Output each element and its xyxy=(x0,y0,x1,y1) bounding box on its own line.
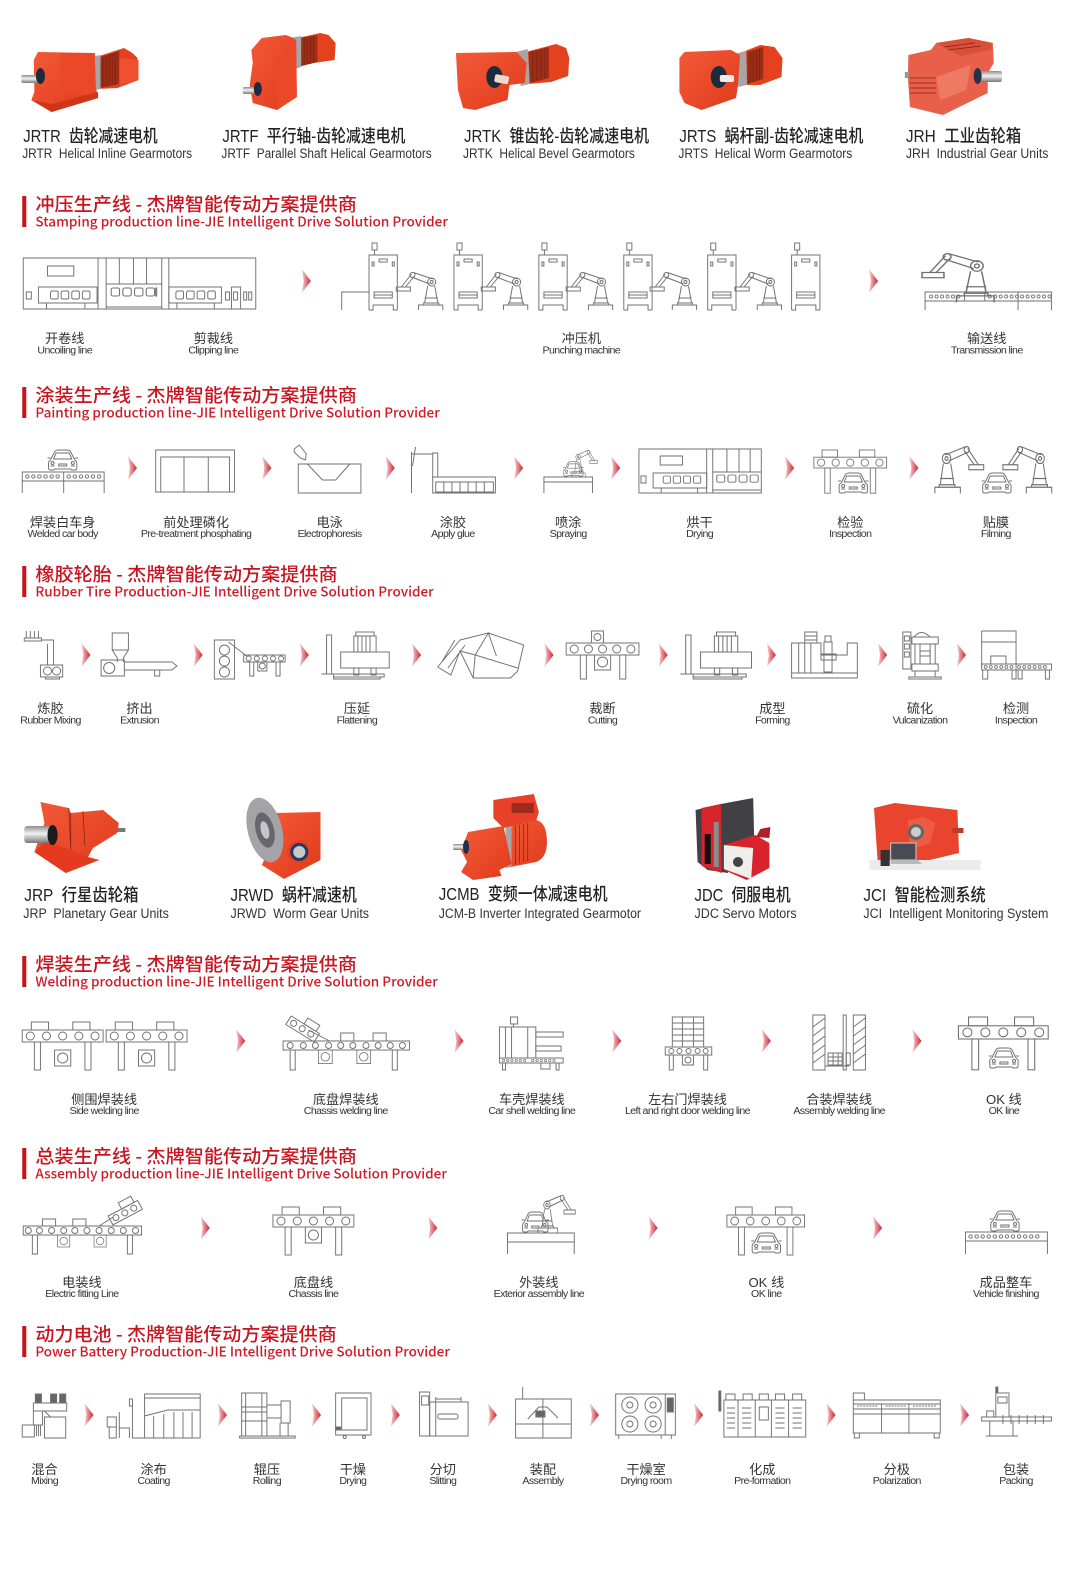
arrow xyxy=(428,1216,437,1240)
label: left and right door welding line xyxy=(625,1092,751,1117)
label: mixing: Mixing xyxy=(31,1475,59,1487)
product image: JCMB integrated gearmotor xyxy=(453,794,547,880)
label: extrusion: Extrusion xyxy=(120,715,160,726)
label: assembly: 装配 xyxy=(530,1462,556,1477)
label: electric fitting line xyxy=(45,1275,119,1300)
label: pre-treatment: Pre-treatment phosphating xyxy=(141,528,252,540)
label: side welding line: Side welding line xyxy=(69,1105,140,1117)
arrow xyxy=(201,1216,210,1240)
label: vulcanization: 硫化 xyxy=(907,701,933,716)
arrow xyxy=(611,456,620,480)
icon: drying room xyxy=(616,1394,675,1439)
label: vehicle finishing xyxy=(973,1275,1040,1300)
label: transmission line: 输送线 xyxy=(967,331,1006,346)
arrow xyxy=(300,643,309,667)
label: cutting xyxy=(588,701,618,726)
icon: polarization xyxy=(853,1393,940,1438)
product subtitle: JRWD: JRWD Worm Gear Units xyxy=(231,905,369,921)
label: slitting xyxy=(429,1462,457,1487)
product image: JDC servo motor xyxy=(696,798,770,880)
section bar xyxy=(22,956,26,987)
icon: drying xyxy=(639,449,761,493)
label: welded car body xyxy=(28,515,99,540)
product title: JRTF: JRTF 平行轴-齿轮减速电机 xyxy=(222,126,406,146)
arrow xyxy=(912,1029,922,1053)
icon: car shell welding xyxy=(499,1017,563,1070)
label: pre-formation: 化成 xyxy=(749,1462,775,1477)
product title: JCMB: JCMB 变频一体减速电机 xyxy=(439,884,608,904)
product title: JRTK: JRTK 锥齿轮-齿轮减速电机 xyxy=(464,126,649,146)
label: transmission line: Transmission line xyxy=(951,345,1023,356)
arrow xyxy=(873,1216,882,1240)
arrow xyxy=(302,269,311,293)
arrow xyxy=(869,269,878,293)
icon: OK line xyxy=(958,1017,1048,1070)
arrow xyxy=(262,456,271,480)
label: electrophoresis: Electrophoresis xyxy=(298,528,362,540)
product subtitle: JRTF: JRTF Parallel Shaft Helical Gearmotors xyxy=(221,145,432,161)
label: chassis welding line xyxy=(304,1092,388,1117)
arrow xyxy=(785,456,794,480)
label: rubber mixing xyxy=(20,701,82,726)
label: rolling: Rolling xyxy=(253,1475,282,1487)
arrow xyxy=(386,456,395,480)
panel: assembly production line xyxy=(22,1142,1047,1300)
label: coating xyxy=(138,1462,171,1487)
label: electrophoresis: 电泳 xyxy=(316,515,343,530)
product image: JCI monitoring system xyxy=(869,803,981,870)
icon: extrusion xyxy=(101,633,177,676)
icon: inspection tire xyxy=(982,631,1051,679)
panel: painting production line xyxy=(22,381,1052,540)
label: welded car body: 焊装白车身 xyxy=(30,515,96,530)
arrow xyxy=(590,1403,599,1427)
arrow xyxy=(194,643,203,667)
arrow xyxy=(762,1029,771,1053)
icon: pre-formation xyxy=(719,1391,806,1437)
arrow xyxy=(128,456,137,480)
icon: electric fitting xyxy=(23,1194,142,1254)
arrow xyxy=(659,643,668,667)
icon: door welding xyxy=(665,1017,712,1070)
icon: cutting xyxy=(566,631,639,679)
icon: mixing xyxy=(22,1394,67,1438)
icon: welded car body xyxy=(22,450,104,493)
subheading: Rubber Tire Production-JIE Intelligent Drive Solution Provider xyxy=(35,581,434,600)
arrow xyxy=(312,1403,321,1427)
label: left and right door welding line: Left and right door welding line xyxy=(625,1105,751,1117)
label: pre-formation: Pre-formation xyxy=(734,1475,791,1487)
label: drying: 烘干 xyxy=(686,515,713,530)
product subtitle: JRH: JRH Industrial Gear Units xyxy=(906,145,1048,161)
icon: forming machine xyxy=(680,632,752,679)
label: chassis line: 底盘线 xyxy=(294,1275,333,1290)
label: pre-treatment xyxy=(141,515,252,540)
product subtitle: JRTR: JRTR Helical Inline Gearmotors xyxy=(22,145,192,161)
product image: JRWD worm gear unit xyxy=(240,794,320,879)
product subtitle: JRTK: JRTK Helical Bevel Gearmotors xyxy=(463,145,635,161)
label: forming: 成型 xyxy=(759,701,786,716)
heading: 动力电池 - 杰牌智能传动方案提供商 xyxy=(35,1320,337,1347)
icon: rollers xyxy=(214,640,285,679)
label: rolling xyxy=(253,1462,282,1487)
label: chassis welding line: Chassis welding line xyxy=(304,1105,388,1117)
arrow xyxy=(514,456,523,480)
label: coating: Coating xyxy=(138,1475,171,1487)
icon: uncoiling and clipping line xyxy=(23,258,256,309)
section bar xyxy=(22,566,26,597)
heading: 橡胶轮胎 - 杰牌智能传动方案提供商 xyxy=(35,560,338,587)
products row 1 xyxy=(21,33,1048,161)
label: rubber mixing: Rubber Mixing xyxy=(20,715,82,726)
label: electric fitting line: Electric fitting Line xyxy=(45,1288,119,1300)
label: vulcanization xyxy=(893,701,948,726)
icon: packing xyxy=(982,1387,1051,1436)
label: vulcanization: Vulcanization xyxy=(893,715,948,726)
arrow xyxy=(391,1403,400,1427)
label: OK line: OK 线 xyxy=(986,1092,1022,1107)
icon: electrophoresis xyxy=(294,445,361,493)
icon: spraying xyxy=(544,450,598,493)
label: cutting: 裁断 xyxy=(589,701,616,716)
product title: JDC: JDC 伺服电机 xyxy=(695,885,791,905)
products row 2 xyxy=(23,794,1048,921)
icon: side welding xyxy=(22,1022,187,1070)
label: forming: Forming xyxy=(755,715,790,726)
label: chassis welding line: 底盘焊装线 xyxy=(313,1092,379,1107)
label: chassis line xyxy=(288,1275,339,1300)
label: slitting: Slitting xyxy=(429,1475,457,1487)
label: spraying xyxy=(550,515,587,540)
label: flattening: Flattening xyxy=(337,715,378,726)
label: uncoiling line: Uncoiling line xyxy=(37,345,93,356)
product subtitle: JRP: JRP Planetary Gear Units xyxy=(23,905,169,921)
panel: rubber tire production xyxy=(20,560,1051,726)
label: OK line xyxy=(986,1092,1022,1117)
icon: transmission line robot xyxy=(922,254,1051,310)
label: polarization xyxy=(873,1462,922,1487)
label: side welding line xyxy=(69,1092,140,1117)
arrow xyxy=(878,643,887,667)
label: welded car body: Welded car body xyxy=(28,528,99,540)
product title: JCI: JCI 智能检测系统 xyxy=(863,885,986,905)
icon: pre-treatment xyxy=(156,450,235,492)
icon: OK line xyxy=(727,1207,805,1255)
arrow xyxy=(767,643,776,667)
arrow xyxy=(909,456,918,480)
icon: flattening xyxy=(321,632,389,679)
arrow xyxy=(957,643,966,667)
label: chassis line: Chassis line xyxy=(288,1288,339,1300)
icon: exterior assembly xyxy=(508,1196,575,1254)
arrow xyxy=(236,1029,245,1053)
icon: chassis welding xyxy=(283,1010,409,1070)
icon: vehicle finishing xyxy=(966,1211,1047,1254)
arrow xyxy=(649,1216,658,1240)
arrow xyxy=(84,1403,94,1427)
arrow xyxy=(488,1403,497,1427)
label: electrophoresis xyxy=(298,515,362,540)
section bar xyxy=(22,1148,26,1179)
label: clipping line: Clipping line xyxy=(188,345,239,356)
product image: JRTS gearmotor xyxy=(679,45,783,110)
label: left and right door welding line: 左右门焊装线 xyxy=(648,1092,727,1107)
label: OK line: OK line xyxy=(989,1105,1020,1117)
label: uncoiling line: 开卷线 xyxy=(45,331,84,346)
icon: rolling xyxy=(240,1393,295,1438)
label: car shell welding line xyxy=(488,1092,576,1117)
section bar xyxy=(22,1326,26,1357)
label: OK line: OK 线 xyxy=(748,1275,784,1290)
subheading: Power Battery Production-JIE Intelligent Drive Solution Provider xyxy=(35,1341,450,1360)
icon: polygon xyxy=(438,633,524,678)
label: drying xyxy=(339,1462,367,1487)
label: inspection: 检测 xyxy=(1003,701,1029,716)
heading: 总装生产线 - 杰牌智能传动方案提供商 xyxy=(35,1142,357,1169)
product image: JRP planetary gear unit xyxy=(24,802,125,873)
label: drying room xyxy=(620,1462,672,1487)
product subtitle: JRTS: JRTS Helical Worm Gearmotors xyxy=(678,145,852,161)
label: assembly welding line xyxy=(793,1092,886,1117)
arrow xyxy=(544,643,554,667)
icon: inspection xyxy=(814,450,887,493)
section bar xyxy=(22,196,26,227)
label: pre-formation xyxy=(734,1462,791,1487)
label: uncoiling line xyxy=(37,331,93,356)
label: packing: 包装 xyxy=(1003,1462,1029,1477)
label: spraying: 喷涂 xyxy=(555,515,581,530)
label: drying room: 干燥室 xyxy=(626,1462,666,1477)
label: electric fitting line: 电装线 xyxy=(62,1275,102,1290)
product title: JRWD: JRWD 蜗杆减速机 xyxy=(231,885,357,905)
product subtitle: JCI: JCI Intelligent Monitoring System xyxy=(863,905,1048,921)
label: drying: Drying xyxy=(339,1475,367,1487)
label: exterior assembly line: Exterior assembly line xyxy=(494,1288,585,1300)
label: spraying: Spraying xyxy=(550,528,587,540)
product subtitle: JDC: JDC Servo Motors xyxy=(695,905,797,921)
label: assembly welding line: Assembly welding line xyxy=(793,1105,886,1117)
subheading: Painting production line-JIE Intelligent Drive Solution Provider xyxy=(35,402,440,421)
label: car shell welding line: 车壳焊装线 xyxy=(499,1092,565,1107)
icon: filming xyxy=(935,447,1052,494)
arrow xyxy=(960,1403,969,1427)
label: polarization: 分极 xyxy=(884,1462,910,1477)
label: side welding line: 侧围焊装线 xyxy=(71,1092,137,1107)
label: OK line xyxy=(748,1275,784,1300)
label: coating: 涂布 xyxy=(141,1462,167,1477)
icon: apply glue xyxy=(411,447,495,493)
subheading: Welding production line-JIE Intelligent Drive Solution Provider xyxy=(35,971,438,990)
label: drying: 干燥 xyxy=(340,1462,366,1477)
label: inspection: 检验 xyxy=(837,515,863,530)
label: apply glue: 涂胶 xyxy=(440,515,466,530)
section bar xyxy=(22,387,26,418)
label: punching machine: 冲压机 xyxy=(562,331,601,346)
label: OK line: OK line xyxy=(751,1288,782,1300)
icon: rubber mixing xyxy=(24,631,63,679)
label: transmission line xyxy=(951,331,1023,356)
label: drying room: Drying room xyxy=(620,1475,672,1487)
icon: vulcanization xyxy=(903,632,941,679)
label: exterior assembly line xyxy=(494,1275,585,1300)
icon: assembly welding xyxy=(813,1015,865,1070)
label: punching machine xyxy=(543,331,621,356)
arrow xyxy=(826,1403,836,1427)
heading: 涂装生产线 - 杰牌智能传动方案提供商 xyxy=(35,381,357,408)
label: flattening: 压延 xyxy=(344,701,370,716)
icon: chassis line xyxy=(273,1207,354,1255)
label: assembly welding line: 合装焊装线 xyxy=(806,1092,872,1107)
label: mixing xyxy=(31,1462,59,1487)
arrow xyxy=(81,643,90,667)
label: rubber mixing: 炼胶 xyxy=(37,701,64,716)
product image: JRH industrial gear unit xyxy=(905,38,1002,115)
label: vehicle finishing: 成品整车 xyxy=(980,1275,1032,1290)
label: apply glue xyxy=(431,515,475,540)
label: packing xyxy=(999,1462,1034,1487)
label: drying: Drying xyxy=(686,528,714,540)
label: assembly: Assembly xyxy=(522,1475,565,1487)
label: punching machine: Punching machine xyxy=(543,345,621,356)
icon: slitting xyxy=(420,1392,468,1436)
icon: punching machines with robots xyxy=(342,243,820,310)
label: forming xyxy=(755,701,790,726)
label: slitting: 分切 xyxy=(430,1462,456,1477)
product title: JRTS: JRTS 蜗杆副-齿轮减速电机 xyxy=(679,126,864,146)
arrow xyxy=(454,1029,464,1053)
product subtitle: JCMB: JCM-B Inverter Integrated Gearmotor xyxy=(439,905,641,921)
product image: JRTF gearmotor xyxy=(243,33,336,110)
label: clipping line: 剪裁线 xyxy=(194,331,233,346)
arrow xyxy=(412,643,421,667)
label: drying xyxy=(686,515,714,540)
label: filming: 贴膜 xyxy=(983,515,1009,530)
panel: power battery production xyxy=(22,1320,1051,1487)
label: extrusion: 挤出 xyxy=(126,701,153,716)
icon: forming press xyxy=(792,632,857,678)
arrow xyxy=(694,1403,703,1427)
label: inspection: Inspection xyxy=(829,528,872,540)
label: inspection: Inspection xyxy=(995,715,1038,726)
subheading: Stamping production line-JIE Intelligent Drive Solution Provider xyxy=(35,211,448,230)
heading: 冲压生产线 - 杰牌智能传动方案提供商 xyxy=(35,190,357,217)
panel: stamping production line xyxy=(22,190,1051,356)
label: rolling: 辊压 xyxy=(254,1462,280,1477)
label: car shell welding line: Car shell welding line xyxy=(488,1105,576,1117)
label: extrusion xyxy=(120,701,160,726)
label: vehicle finishing: Vehicle finishing xyxy=(973,1288,1040,1300)
arrow xyxy=(612,1029,621,1053)
product title: JRTR: JRTR 齿轮减速电机 xyxy=(23,126,158,146)
product image: JRTK gearmotor xyxy=(456,44,569,110)
label: pre-treatment: 前处理磷化 xyxy=(163,515,229,530)
label: filming: Filming xyxy=(981,528,1012,540)
icon: assembly xyxy=(516,1387,571,1438)
label: exterior assembly line: 外装线 xyxy=(519,1275,559,1290)
label: apply glue: Apply glue xyxy=(431,528,475,540)
product image: JRTR gearmotor xyxy=(21,48,139,112)
product title: JRP: JRP 行星齿轮箱 xyxy=(24,885,139,905)
label: cutting: Cutting xyxy=(588,715,618,726)
label: flattening xyxy=(337,701,378,726)
heading: 焊装生产线 - 杰牌智能传动方案提供商 xyxy=(35,950,357,977)
icon: coating xyxy=(107,1394,200,1438)
arrow xyxy=(218,1403,227,1427)
label: packing: Packing xyxy=(999,1475,1034,1487)
label: inspection xyxy=(995,701,1038,726)
label: assembly xyxy=(522,1462,565,1487)
subheading: Assembly production line-JIE Intelligent Drive Solution Provider xyxy=(35,1163,447,1182)
icon: drying xyxy=(336,1393,371,1438)
product title: JRH: JRH 工业齿轮箱 xyxy=(906,126,1021,146)
panel: welding production line xyxy=(22,950,1048,1117)
label: polarization: Polarization xyxy=(873,1475,922,1487)
label: filming xyxy=(981,515,1012,540)
label: mixing: 混合 xyxy=(31,1462,58,1477)
label: clipping line xyxy=(188,331,239,356)
label: inspection xyxy=(829,515,872,540)
